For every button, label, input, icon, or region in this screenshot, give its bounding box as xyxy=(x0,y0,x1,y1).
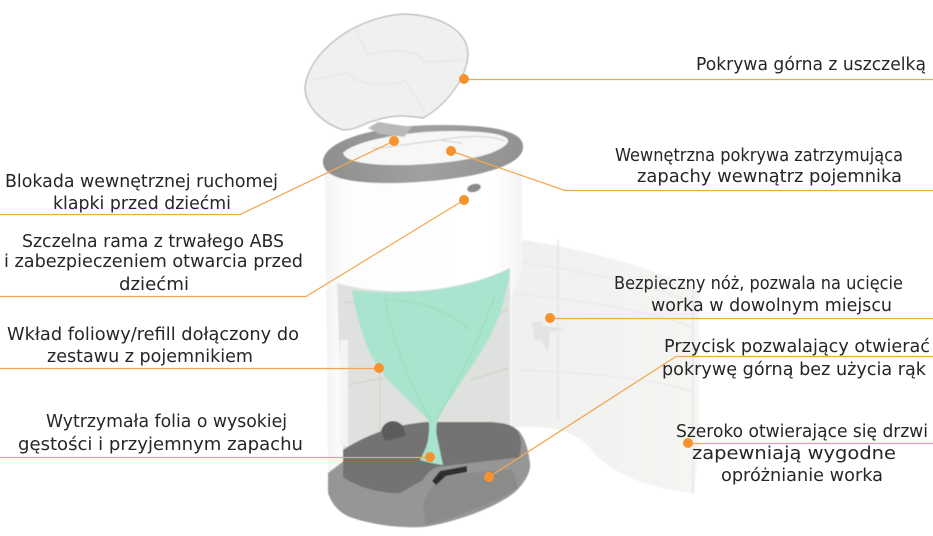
label: door: opróżnianie worka xyxy=(721,466,883,486)
lid hinge xyxy=(368,122,412,137)
line: child lock xyxy=(0,141,394,214)
label: ABS frame: Szczelna rama z trwałego ABS xyxy=(22,232,284,252)
label: foil xyxy=(18,412,303,455)
label: inner lid: Wewnętrzna pokrywa zatrzymująca xyxy=(615,146,903,166)
label: door xyxy=(676,422,928,486)
label: child lock xyxy=(5,172,278,214)
inner lid edge xyxy=(372,136,505,149)
label: inner lid xyxy=(615,146,903,187)
line: lid xyxy=(464,78,933,80)
label: ABS frame: i zabezpieczeniem otwarcia przed xyxy=(4,252,303,272)
label: pedal button: Przycisk pozwalający otwierać xyxy=(664,337,930,357)
label: pedal button xyxy=(662,337,930,380)
label: refill: Wkład foliowy/refill dołączony do xyxy=(7,325,299,345)
label: top lid: Pokrywa górna z uszczelką xyxy=(696,55,926,75)
bin rim xyxy=(323,125,523,183)
line: foil xyxy=(0,456,430,458)
bin body xyxy=(325,170,522,480)
line: frame xyxy=(0,200,464,296)
line: refill xyxy=(0,368,379,370)
hinge strip xyxy=(340,340,348,446)
label: knife: Bezpieczny nóż, pozwala na ucięcie xyxy=(614,274,903,294)
label: ABS frame: dziećmi xyxy=(119,275,189,295)
label: foil: gęstości i przyjemnym zapachu xyxy=(18,435,303,455)
open door xyxy=(511,240,699,494)
base xyxy=(328,430,530,527)
label: refill xyxy=(7,325,299,367)
interior cavity xyxy=(337,268,510,452)
label: foil: Wytrzymała folia o wysokiej xyxy=(46,412,287,432)
label: child lock: Blokada wewnętrznej ruchomej xyxy=(5,172,278,192)
drawer slot xyxy=(432,466,467,485)
door knife bracket xyxy=(532,321,566,352)
label: knife: worka w dowolnym miejscu xyxy=(651,296,892,316)
bag xyxy=(352,268,510,465)
line: door xyxy=(688,442,933,444)
label: door: Szeroko otwierające się drzwi xyxy=(676,422,928,442)
illustration: diaper bin xyxy=(305,14,699,527)
floor xyxy=(343,422,521,493)
label: door: zapewniają wygodne xyxy=(692,444,896,464)
label: knife xyxy=(614,274,903,316)
rim button xyxy=(466,182,482,194)
label: ABS frame xyxy=(4,232,303,295)
label: pedal button: pokrywę górną bez użycia rąk xyxy=(662,360,927,380)
label: refill: zestawu z pojemnikiem xyxy=(47,347,253,367)
callout lines xyxy=(0,80,933,477)
label: inner lid: zapachy wewnątrz pojemnika xyxy=(637,167,902,187)
label: child lock: klapki przed dziećmi xyxy=(53,194,231,214)
line: knife xyxy=(550,318,933,320)
mechanism block xyxy=(381,421,406,441)
lid xyxy=(305,14,468,130)
line: inner lid xyxy=(451,151,933,190)
line: pedal button xyxy=(489,356,933,477)
drawer xyxy=(423,470,518,525)
callout dots xyxy=(374,74,693,482)
